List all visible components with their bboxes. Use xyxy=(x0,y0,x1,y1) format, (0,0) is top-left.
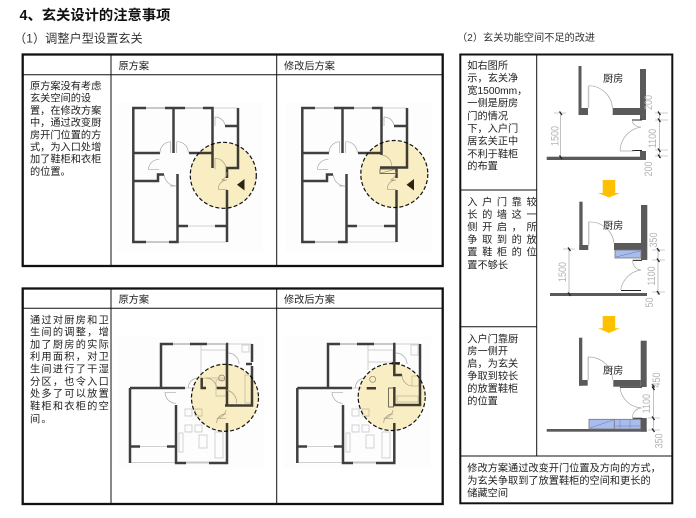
table 2 header: modified: 修改后方案 xyxy=(284,293,335,306)
table 1 description: 加了鞋柜和衣柜 xyxy=(30,153,101,166)
note: option two: 启，为玄关 xyxy=(467,357,518,370)
table 1 description: 置，在修改方案 xyxy=(30,104,101,117)
note: problem description: 不利于鞋柜 xyxy=(467,147,518,160)
table 2 description: 利用面积，对卫 xyxy=(30,350,110,363)
subtitle: entrance improvement: （2）玄关功能空间不足的改进 xyxy=(457,31,595,44)
highlight circle xyxy=(358,364,425,430)
table 1 frame xyxy=(23,54,443,266)
arrow down 2 xyxy=(598,316,620,333)
note: option two: 的位置 xyxy=(467,394,498,407)
note: problem description: 宽1500mm， xyxy=(467,84,527,97)
subtitle: adjust layout: （1）调整户型设置玄关 xyxy=(14,30,143,46)
highlight circle xyxy=(192,364,258,431)
diagram: option two xyxy=(547,338,666,449)
table 2 description: 加了厨房的实际 xyxy=(30,338,110,351)
note: option two: 入户门靠厨 xyxy=(467,332,518,345)
entry arrow xyxy=(237,179,244,190)
dimension 200 bottom: 200 xyxy=(643,161,655,177)
floor plan: modified scheme 1 xyxy=(285,102,432,252)
note: conclusion: 为玄关争取到了放置鞋柜的空间和更长的 xyxy=(467,474,651,487)
floor plan: original scheme 1 xyxy=(116,102,263,252)
highlight circle xyxy=(190,142,256,208)
dimension 50: 50 xyxy=(644,297,656,308)
dimension 350: 350 xyxy=(648,232,660,248)
arrow down 1 xyxy=(598,180,620,198)
note: option one: 侧开启，所 xyxy=(467,221,541,234)
dimension 200 top: 200 xyxy=(643,95,655,110)
kitchen label: 厨房 xyxy=(603,219,623,232)
note: option one: 入户门靠较 xyxy=(467,196,541,209)
note: option one: 置不够长 xyxy=(467,259,508,271)
panel: table 1 xyxy=(23,54,443,266)
table 2 header: original: 原方案 xyxy=(118,293,149,306)
note: option two: 争取到较长 xyxy=(467,370,518,383)
table 1 header: modified: 修改后方案 xyxy=(284,60,335,72)
dimension 1100: 1100 xyxy=(641,394,653,413)
note: conclusion: 储藏空间 xyxy=(467,486,508,499)
kitchen label: 厨房 xyxy=(603,364,623,377)
dimension 350: 350 xyxy=(654,433,666,449)
dimension 1500: 1500 xyxy=(557,262,569,282)
table 1 description: 的位置。 xyxy=(30,165,71,178)
note: problem description: 下，入户门 xyxy=(467,122,518,135)
table 2 description: 处多了可以放置 xyxy=(30,387,110,400)
table 2 description: 生间的调整，增 xyxy=(30,326,110,339)
panel: entrance improvement table xyxy=(460,54,672,503)
table 2 frame xyxy=(23,288,443,504)
table 1 description: 中，通过改变厨 xyxy=(30,116,101,129)
title: 4、玄关设计的注意事项 xyxy=(20,6,170,24)
note: problem description: 居玄关正中 xyxy=(467,135,518,148)
diagram: option one xyxy=(550,202,665,308)
kitchen label: 厨房 xyxy=(603,72,623,85)
table 1 description: 式，为入口处增 xyxy=(30,140,101,154)
dimension 450: 450 xyxy=(651,372,663,388)
table 1 description: 房开门位置的方 xyxy=(30,128,101,141)
note: option one: 置鞋柜的位 xyxy=(467,246,541,259)
floor plan: modified scheme 2 xyxy=(284,337,431,469)
table 1 description: 玄关空间的设 xyxy=(30,92,91,105)
table 1 header: original: 原方案 xyxy=(118,60,149,72)
note: problem description: 示，玄关净 xyxy=(467,72,518,85)
note: problem description: 门的情况 xyxy=(467,109,508,122)
dimension 1500: 1500 xyxy=(550,126,562,146)
note: option two: 房一侧开 xyxy=(467,344,508,357)
floor plan: original scheme 2 xyxy=(117,337,264,469)
entry arrow xyxy=(406,179,414,190)
highlight circle xyxy=(361,140,428,208)
note: problem description: 的布置 xyxy=(467,159,498,172)
note: problem description: 一侧是厨房 xyxy=(467,97,518,110)
table 2 description: 间。 xyxy=(30,412,53,426)
diagram: entrance before xyxy=(547,66,668,177)
note: conclusion: 修改方案通过改变开门位置及方向的方式， xyxy=(467,461,661,474)
table 2 description: 生间进行了干湿 xyxy=(30,362,110,376)
dimension 1100: 1100 xyxy=(646,266,658,286)
note: option one: 争取到的放 xyxy=(467,233,541,246)
note: problem description: 如右图所 xyxy=(467,59,508,72)
improvement table frame xyxy=(460,54,672,503)
note: option two: 的放置鞋柜 xyxy=(467,382,518,395)
note: option one: 长的墙这一 xyxy=(467,208,541,221)
panel: table 2 xyxy=(23,288,443,504)
table 2 description: 分区，也令入口 xyxy=(30,375,110,388)
table 1 description: 原方案没有考虑 xyxy=(30,80,101,92)
table 2 description: 鞋柜和衣柜的空 xyxy=(30,399,110,412)
dimension 1100: 1100 xyxy=(647,128,659,148)
table 2 description: 通过对厨房和卫 xyxy=(30,313,110,326)
